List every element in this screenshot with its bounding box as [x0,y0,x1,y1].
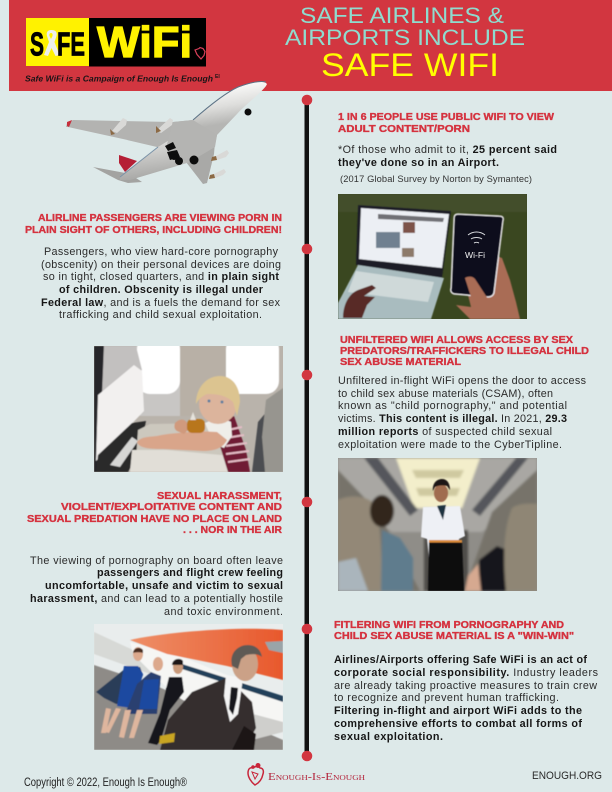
right body text: survey: they've done so in an Airport. [338,157,499,169]
right body text: survey: (2017 Global Survey by Norton by Symantec) [340,174,532,184]
footer logo: Enough Is Enough [248,763,365,785]
footer logo: Enough Is Enough: Enough-Is-Enough [268,772,365,783]
left section heading: sexual harassment: SEXUAL PREDATION HAVE NO PLACE ON LAND [27,514,282,525]
right body text: survey: *Of those who admit to it, 25 percent said [338,144,557,156]
right section heading: filtering win-win: FITLERING WIFI FROM PORNOGRAPHY AND [334,620,564,631]
left body text: harassment: The viewing of pornography on board often leave [30,555,283,567]
footer copyright: Copyright © 2022, Enough Is Enough® [24,777,187,789]
right section heading: unfiltered WiFi [340,335,589,368]
left body text: passengers: of children. Obscenity is illegal under [59,284,264,296]
left section heading: sexual harassment [27,491,283,536]
left body text: passengers: Passengers, who view hard-core pornography [44,246,279,258]
left section heading: passengers viewing porn [25,213,282,236]
photo: flight attendant in aisle [338,458,537,591]
landing gear [165,108,252,165]
right body text: unfiltered WiFi: exploitation were made to the CyberTipline. [338,439,562,451]
right body text: filtering: are already taking proactive measures to train crew [334,680,597,692]
right body text: filtering: Airlines/Airports offering Safe WiFi is an act of [334,654,587,666]
tagline mark: EI [215,74,220,80]
left section heading: passengers viewing porn: PLAIN SIGHT OF OTHERS, INCLUDING CHILDREN! [25,225,282,236]
right body text: filtering [334,654,599,743]
timeline [302,95,312,761]
left body text: passengers: (obscenity) on their personal devices are doing [41,259,281,271]
right section heading: filtering win-win: CHILD SEX ABUSE MATERIAL IS A "WIN-WIN" [334,631,574,642]
left body text: harassment [30,555,283,618]
right section heading: 1 in 6 people: 1 IN 6 PEOPLE USE PUBLIC WIFI TO VIEW [338,112,555,123]
logo: Safe WiFi: S [30,26,44,62]
right section heading: 1 in 6 people [338,112,555,135]
right body text: unfiltered WiFi: million reports of suspected child sexual [338,426,552,438]
right section heading: 1 in 6 people: ADULT CONTENT/PORN [338,124,470,135]
wifi symbol on phone: Wi-Fi [465,251,485,260]
right body text: unfiltered WiFi: known as "child pornography," and potential [338,400,567,412]
left section heading: sexual harassment: . . . NOR IN THE AIR [183,525,283,536]
logo: Safe WiFi: FE [57,26,85,62]
title [285,3,525,83]
photo: child at airplane window [94,336,283,472]
right body text: unfiltered WiFi [338,375,587,451]
right body text: unfiltered WiFi: victims. This content is illegal. In 2021, 29.3 [338,413,567,425]
left section heading: passengers viewing porn: ALIRLINE PASSENGERS ARE VIEWING PORN IN [38,213,282,224]
airplane illustration [66,81,267,184]
right body text: filtering: sexual exploitation. [334,731,443,743]
header banner [9,0,612,91]
photo: laptop and phone with WiFi [338,194,527,319]
title: SAFE WIFI [321,47,499,83]
title: SAFE AIRLINES & [300,3,504,28]
left body text: passengers: Federal law, and is a fuels the demand for sex [41,297,281,309]
left section heading: sexual harassment: SEXUAL HARASSMENT, [157,491,282,502]
right section heading: filtering win-win [334,620,574,642]
crew members [96,645,262,750]
right body text: unfiltered WiFi: to child sex abuse materials (CSAM), often [338,388,553,400]
logo: Safe WiFi [26,18,206,67]
left body text: passengers [41,246,281,321]
logo: Safe WiFi: WiFi [97,18,192,67]
right body text: filtering: comprehensive efforts to combat all forms of [334,718,582,730]
right body text: filtering: to recognize and prevent human trafficking. [334,692,559,704]
photo: flight crew by airplane [94,624,283,750]
left section heading: sexual harassment: VIOLENT/EXPLOITATIVE CONTENT AND [61,502,282,513]
right body text: survey [338,144,557,184]
right body text: unfiltered WiFi: Unfiltered in-flight WiFi opens the door to access [338,375,587,387]
left body text: passengers: so in tight, closed quarters, and in plain sight [43,271,279,283]
right section heading: unfiltered WiFi: PREDATORS/TRAFFICKERS TO ILLEGAL CHILD [340,346,589,357]
left body text: harassment: and toxic environment. [164,606,283,618]
left body text: passengers: trafficking and child sexual exploitation. [59,309,262,321]
left body text: harassment: passengers and flight crew feeling [97,567,283,579]
tagline: Safe WiFi is a Campaign of Enough Is Enough [25,74,213,84]
right body text: filtering: corporate social responsibility. Industry leaders [334,667,599,679]
left body text: harassment: harassment, and can lead to a potentially hostile [30,593,283,605]
title: AIRPORTS INCLUDE [285,25,525,50]
right section heading: unfiltered WiFi: UNFILTERED WIFI ALLOWS ACCESS BY SEX [340,335,573,346]
left body text: harassment: uncomfortable, unsafe and victim to sexual [45,580,283,592]
wifi symbol on phone [465,232,485,260]
footer website: ENOUGH.ORG [532,770,602,782]
right section heading: unfiltered WiFi: SEX ABUSE MATERIAL [340,357,461,368]
right body text: filtering: Filtering in-flight and airport WiFi adds to the [334,705,582,717]
